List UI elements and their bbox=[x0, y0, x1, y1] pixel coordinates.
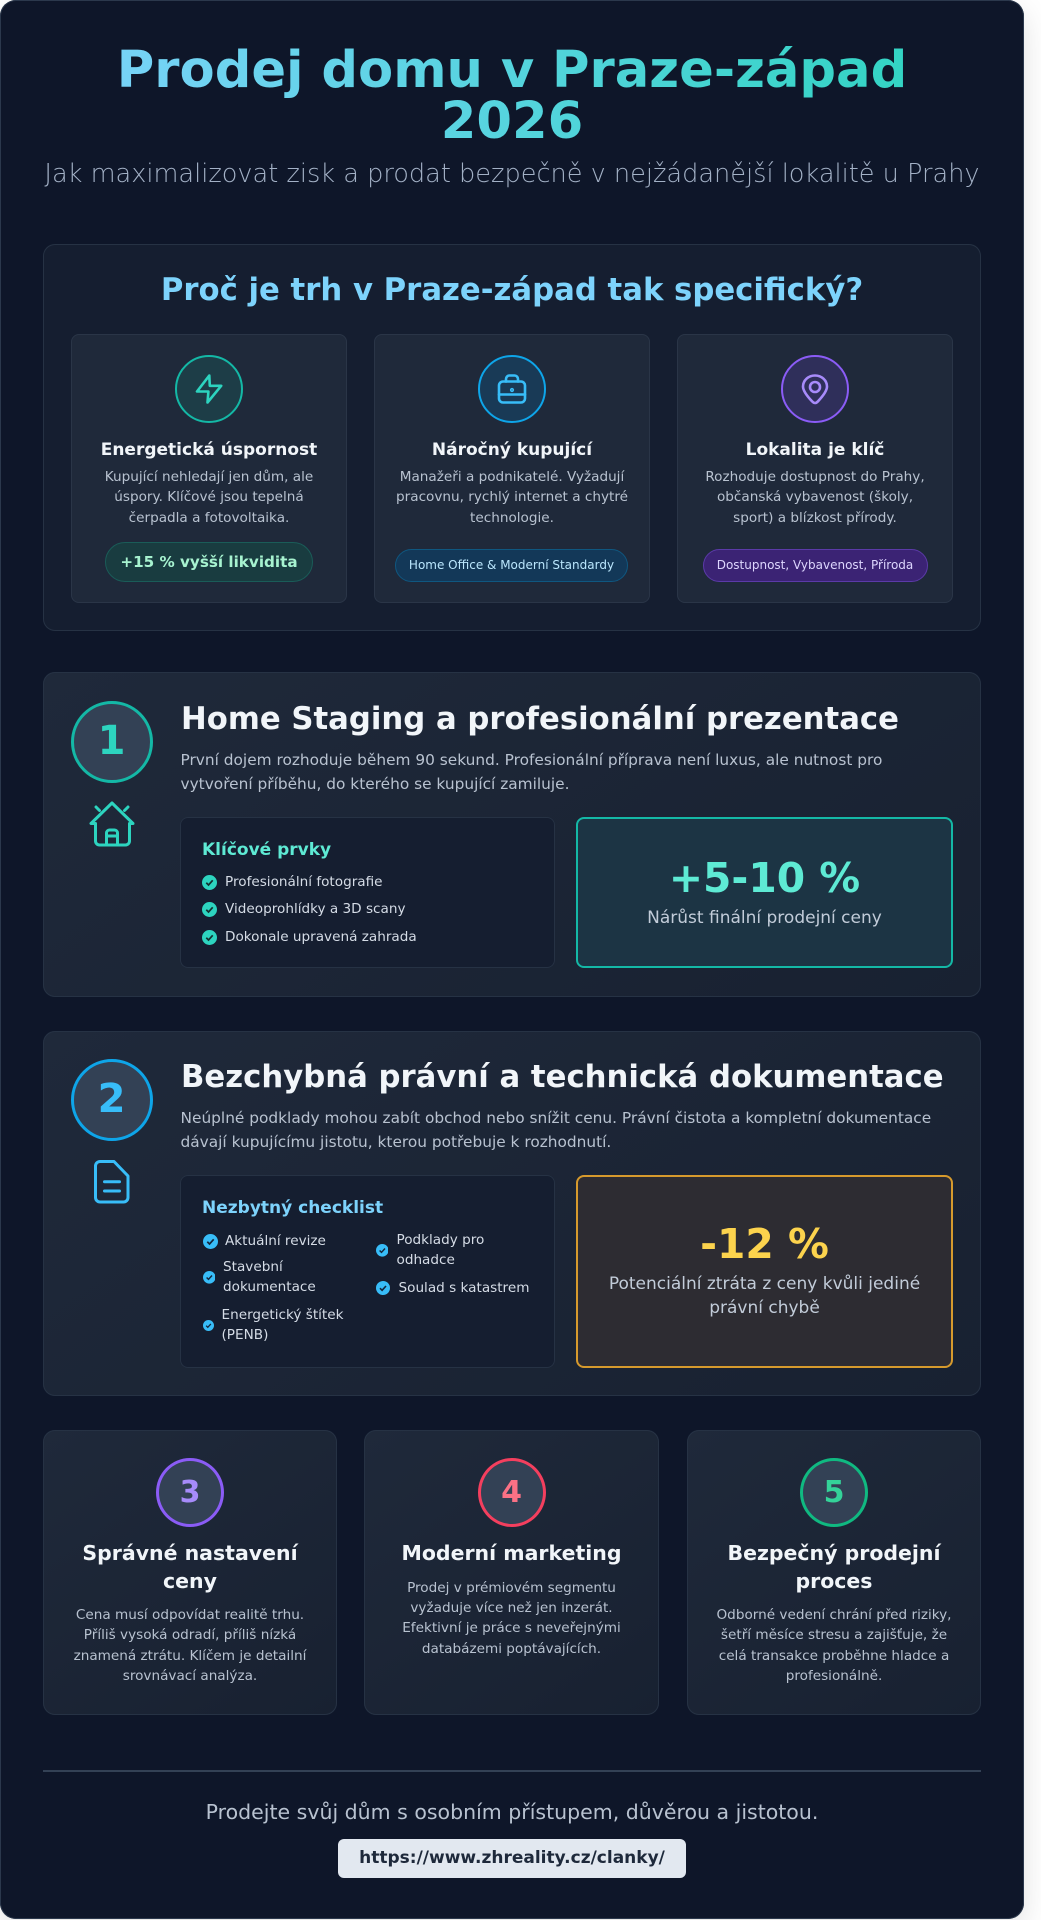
step text: dávají kupujícímu jistotu, kterou potřebuje k rozhodnutí. bbox=[180, 1133, 611, 1151]
checklist item: odhadce bbox=[396, 1252, 455, 1268]
panel: step 4 marketing bbox=[364, 1430, 659, 1715]
check icon bbox=[376, 1244, 388, 1257]
icon: briefcase bbox=[478, 355, 546, 423]
step text bbox=[180, 1109, 931, 1151]
step text: Neúplné podklady mohou zabít obchod nebo snížit cenu. Právní čistota a kompletní dokumentace bbox=[180, 1109, 931, 1127]
tile text: Příliš vysoká odradí, příliš nízká bbox=[84, 1627, 296, 1643]
stat label bbox=[609, 1274, 920, 1318]
checklist item bbox=[223, 1259, 316, 1295]
card text bbox=[705, 469, 925, 526]
panel: step 3 pricing bbox=[43, 1430, 337, 1715]
list item: Videoprohlídky a 3D scany bbox=[225, 901, 406, 917]
step number 2: 2 bbox=[98, 1076, 125, 1122]
tile heading: proces bbox=[795, 1569, 872, 1593]
tile text: vyžaduje více než jen inzerát. bbox=[410, 1600, 613, 1616]
checklist item: Soulad s katastrem bbox=[398, 1280, 529, 1296]
step number 4: 4 bbox=[501, 1475, 522, 1510]
tile text: databázemi poptávajících. bbox=[422, 1641, 601, 1657]
tile heading: Moderní marketing bbox=[402, 1541, 621, 1565]
tile text: znamená ztrátu. Klíčem je detailní bbox=[74, 1648, 306, 1664]
card text: sport) a blízkost přírody. bbox=[733, 510, 897, 526]
step number 3 bbox=[156, 1458, 224, 1527]
card: energy efficiency bbox=[71, 334, 347, 603]
subtitle: Jak maximalizovat zisk a prodat bezpečně v nejžádanější lokalitě u Prahy bbox=[44, 159, 980, 189]
stat value: +5-10 % bbox=[669, 854, 860, 902]
tile text: Odborné vedení chrání před riziky, bbox=[716, 1607, 952, 1623]
tile text: profesionálně. bbox=[786, 1668, 882, 1684]
card text: občanská vybavenost (školy, bbox=[717, 489, 913, 505]
tile heading: Bezpečný prodejní bbox=[727, 1541, 941, 1565]
tile text: šetří měsíce stresu a zajišťuje, že bbox=[721, 1627, 947, 1643]
card: demanding buyer bbox=[374, 334, 650, 603]
panel: step 5 safe process bbox=[687, 1430, 981, 1715]
stat box: price increase bbox=[576, 817, 953, 968]
stat label: právní chybě bbox=[709, 1298, 820, 1318]
check icon bbox=[203, 1320, 214, 1331]
badge bbox=[105, 542, 313, 582]
step text bbox=[180, 751, 882, 793]
icon: map pin bbox=[781, 355, 849, 423]
checklist item: Aktuální revize bbox=[225, 1233, 326, 1249]
checklist item: Podklady pro bbox=[396, 1232, 484, 1248]
list item: Profesionální fotografie bbox=[225, 874, 383, 890]
card text bbox=[396, 469, 628, 526]
tile text bbox=[74, 1607, 307, 1684]
stat label: Potenciální ztráta z ceny kvůli jediné bbox=[609, 1274, 920, 1294]
tile heading bbox=[727, 1541, 942, 1593]
icon: lightning bolt bbox=[175, 355, 243, 423]
step heading: Home Staging a profesionální prezentace bbox=[181, 701, 899, 737]
key elements box bbox=[180, 817, 555, 968]
stat box: price loss bbox=[576, 1175, 953, 1368]
title: Prodej domu v Praze-západ bbox=[117, 40, 907, 100]
card text: Kupující nehledají jen dům, ale bbox=[105, 469, 313, 485]
icon: document bbox=[94, 1160, 130, 1204]
check icon bbox=[376, 1281, 390, 1295]
tile text bbox=[402, 1580, 621, 1657]
badge: Dostupnost, Vybavenost, Příroda bbox=[717, 558, 913, 572]
footer text: Prodejte svůj dům s osobním přístupem, důvěrou a jistotou. bbox=[206, 1800, 818, 1824]
stat label: Nárůst finální prodejní ceny bbox=[647, 908, 882, 928]
card text: pracovnu, rychlý internet a chytré bbox=[396, 489, 628, 505]
stat value: -12 % bbox=[700, 1220, 829, 1268]
tile heading: ceny bbox=[163, 1569, 217, 1593]
checklist box bbox=[180, 1175, 555, 1368]
badge bbox=[702, 549, 928, 582]
card heading: Náročný kupující bbox=[432, 440, 592, 460]
badge bbox=[395, 549, 628, 582]
tile text: Efektivní je práce s neveřejnými bbox=[402, 1620, 621, 1636]
panel: step 1 home staging bbox=[43, 672, 981, 997]
tile heading bbox=[82, 1541, 298, 1593]
step heading: Bezchybná právní a technická dokumentace bbox=[181, 1059, 944, 1095]
panel heading: Proč je trh v Praze-západ tak specifický? bbox=[161, 272, 863, 308]
card heading: Lokalita je klíč bbox=[746, 440, 884, 460]
icon: house bbox=[89, 801, 134, 846]
checklist item: dokumentace bbox=[223, 1279, 316, 1295]
card text: Rozhoduje dostupnost do Prahy, bbox=[705, 469, 925, 485]
checklist item: (PENB) bbox=[222, 1327, 268, 1343]
card text bbox=[105, 469, 313, 526]
badge: Home Office & Moderní Standardy bbox=[409, 558, 614, 572]
box heading: Nezbytný checklist bbox=[202, 1198, 383, 1218]
title: 2026 bbox=[441, 91, 583, 151]
step text: vytvoření příběhu, do kterého se kupující zamiluje. bbox=[180, 775, 570, 793]
card: location bbox=[677, 334, 953, 603]
tile text: celá transakce proběhne hladce a bbox=[719, 1648, 949, 1664]
step text: První dojem rozhoduje během 90 sekund. Profesionální příprava není luxus, ale nutnost pro bbox=[180, 751, 882, 769]
check icon bbox=[203, 1234, 218, 1249]
step number 5 bbox=[800, 1458, 868, 1527]
card text: Manažeři a podnikatelé. Vyžadují bbox=[400, 469, 624, 485]
checklist item: Stavební bbox=[223, 1259, 283, 1275]
title bbox=[43, 44, 981, 147]
tile text: Cena musí odpovídat realitě trhu. bbox=[76, 1607, 304, 1623]
badge: +15 % vyšší likvidita bbox=[120, 553, 298, 571]
step number 2 bbox=[70, 1059, 152, 1141]
tile text bbox=[716, 1607, 952, 1684]
list item: Dokonale upravená zahrada bbox=[225, 928, 417, 944]
tile text: srovnávací analýza. bbox=[123, 1668, 257, 1684]
card heading: Energetická úspornost bbox=[101, 440, 317, 460]
tile text: Prodej v prémiovém segmentu bbox=[407, 1580, 616, 1596]
step number 1: 1 bbox=[98, 718, 125, 764]
step number 4 bbox=[478, 1458, 546, 1527]
tile heading: Správné nastavení bbox=[82, 1541, 298, 1565]
step number 5: 5 bbox=[824, 1475, 844, 1510]
checklist item bbox=[222, 1307, 344, 1343]
checklist item: Energetický štítek bbox=[222, 1307, 344, 1323]
link button: https://www.zhreality.cz/clanky/ bbox=[359, 1848, 665, 1868]
card text: technologie. bbox=[470, 510, 554, 526]
checklist item bbox=[396, 1232, 484, 1268]
check icon bbox=[203, 1271, 215, 1284]
panel: step 2 documentation bbox=[43, 1031, 981, 1396]
card text: úspory. Klíčové jsou tepelná bbox=[114, 489, 304, 505]
step number 3: 3 bbox=[180, 1475, 200, 1510]
link button bbox=[338, 1839, 686, 1878]
box heading: Klíčové prvky bbox=[202, 840, 331, 860]
card text: čerpadla a fotovoltaika. bbox=[129, 510, 289, 526]
panel: market specifics bbox=[43, 244, 981, 631]
step number 1 bbox=[70, 700, 152, 782]
